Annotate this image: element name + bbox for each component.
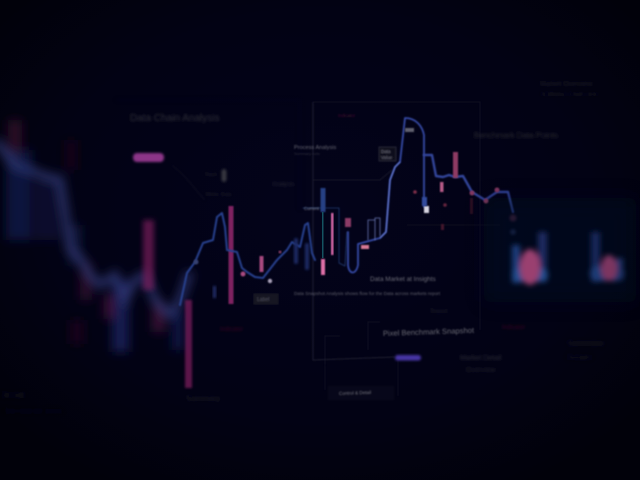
far bottom text: Details xyxy=(566,352,594,362)
far blurred labels xyxy=(130,81,599,403)
far blurred labels: Metric Data xyxy=(206,192,232,198)
center text blocks: Data Snapshot Analysis shows flow for the Data across markets report xyxy=(294,291,441,296)
far blurred labels: Overview xyxy=(466,367,496,374)
far bottom text xyxy=(0,338,605,417)
right blurred panel xyxy=(484,198,636,302)
far blurred labels: Summary xyxy=(186,394,220,403)
far blurred labels: Analysis xyxy=(272,182,294,188)
far blurred labels: Benchmark Data Points xyxy=(474,131,558,140)
center chart line xyxy=(180,118,513,305)
far blurred labels: Market Overview xyxy=(540,81,593,88)
center text blocks: Pixel Benchmark Snapshot xyxy=(383,326,475,338)
far bottom text: Overview data xyxy=(0,406,64,417)
far blurred labels: Value xyxy=(205,172,218,178)
right mini chart two xyxy=(590,232,624,282)
label boxes: Label xyxy=(257,297,269,303)
far bottom text: Summary xyxy=(566,338,605,348)
grid panels and connectors xyxy=(115,100,500,396)
right mini chart one xyxy=(512,232,548,285)
left blurred chart xyxy=(0,120,190,352)
label boxes: Current xyxy=(304,206,320,211)
far blurred labels: Data Chain Analysis xyxy=(130,113,220,124)
center bars and markers xyxy=(194,152,516,298)
center text blocks xyxy=(294,113,475,400)
far blurred labels: Report xyxy=(430,309,448,315)
center text blocks: Indicator xyxy=(338,113,356,118)
label boxes: Data xyxy=(381,149,391,154)
center text blocks: Control & Detail xyxy=(339,390,371,396)
center text blocks: Data Market at Insights xyxy=(370,276,436,283)
purple pill xyxy=(395,355,421,360)
far blurred labels: Indicator xyxy=(220,327,243,333)
far blurred labels: Market Detail xyxy=(460,355,502,362)
label boxes: Value xyxy=(381,155,393,160)
center text blocks: Summary note xyxy=(294,151,321,156)
far bottom text: Detail xyxy=(0,390,26,401)
center text blocks: Process Analysis xyxy=(294,145,336,151)
far blurred labels: Indicator xyxy=(502,325,525,331)
magenta blurred bars xyxy=(133,153,234,388)
label boxes xyxy=(254,128,414,304)
far blurred labels: Additional details note xyxy=(540,92,599,98)
